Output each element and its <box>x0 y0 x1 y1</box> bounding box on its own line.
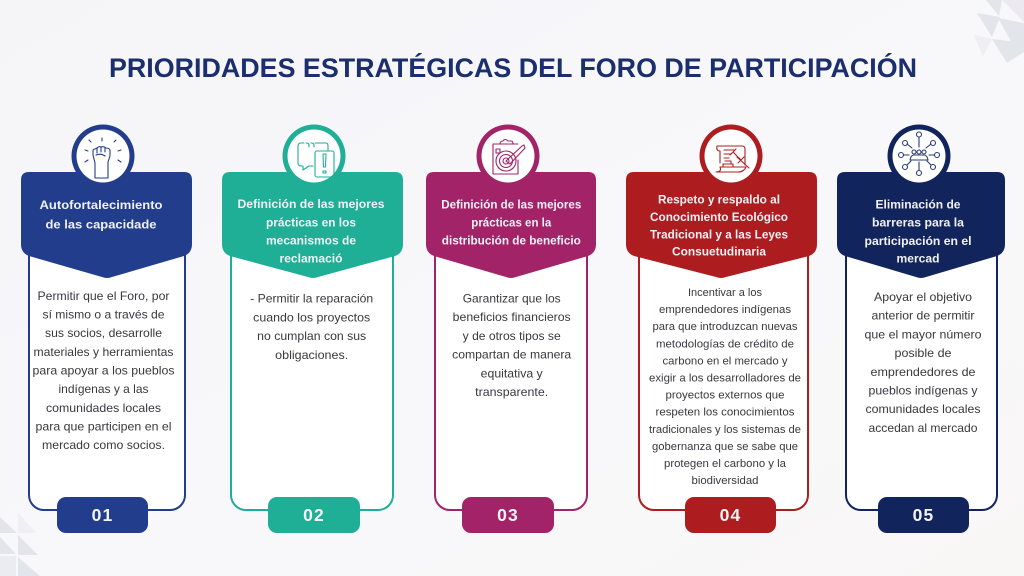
card 1 description <box>32 289 174 452</box>
panel: card 5 market barriers <box>837 124 1005 533</box>
card 4 description: proyectos externos que <box>666 390 784 402</box>
card 4 heading: Consuetudinaria <box>672 245 766 259</box>
card 1 header banner <box>21 172 192 278</box>
card 2 description: cuando los proyectos <box>253 310 370 324</box>
card 4 description: respeten los conocimientos <box>656 407 795 419</box>
panel: card 4 traditional knowledge <box>626 124 817 533</box>
card 2 description: obligaciones. <box>275 348 348 362</box>
card 5 description: pueblos indígenas y <box>868 384 978 398</box>
card 3 description <box>452 292 572 399</box>
card 2 heading <box>238 197 385 265</box>
card 3 number badge <box>462 497 554 533</box>
card 2 number badge: 02 <box>303 505 325 525</box>
card 5 description: comunidades locales <box>866 402 980 416</box>
card 4 description: protegen el carbono y la <box>664 458 787 470</box>
card 4 description: metodologías de crédito de <box>656 338 794 350</box>
panel: card 1 capacity building <box>21 124 192 533</box>
card 1 description: comunidades locales <box>46 401 161 415</box>
card 1 heading: Autofortalecimiento <box>40 198 162 212</box>
card 1 description: sí mismo o a través de <box>42 308 165 322</box>
title: PRIORIDADES ESTRATÉGICAS DEL FORO DE PARTICIPACIÓN <box>109 53 917 83</box>
card 4 description: exigir a los desarrolladores de <box>649 372 801 384</box>
card 2 heading: Definición de las mejores <box>238 197 385 211</box>
card 1 description: mercado como socios. <box>42 438 165 452</box>
card 4 description: gobernanza que se sabe que <box>652 441 798 453</box>
card 4 number badge: 04 <box>720 505 741 525</box>
card 5 body outline <box>846 240 997 510</box>
card 3 heading <box>441 197 582 247</box>
card 1 description: Permitir que el Foro, por <box>38 289 170 303</box>
card 1 number badge <box>57 497 148 533</box>
card 4 description: para que introduzcan nuevas <box>652 321 798 333</box>
card 5 number badge: 05 <box>913 505 934 525</box>
card 5 description: que el mayor número <box>864 327 982 341</box>
card 1 description: materiales y herramientas <box>34 345 174 359</box>
card 5 heading <box>864 197 972 266</box>
card 2 header banner <box>222 172 403 278</box>
card 2 number badge <box>268 497 360 533</box>
panel: card 3 benefit distribution <box>426 124 596 533</box>
card 4 description: biodiversidad <box>692 475 758 487</box>
card 5 heading: barreras para la <box>872 216 964 230</box>
card 3 description: transparente. <box>475 385 548 399</box>
card 5 number badge <box>878 497 969 533</box>
card 5 heading: participación en el <box>864 234 972 248</box>
card 4 heading: Conocimiento Ecológico <box>650 210 788 224</box>
card 3 heading: distribución de beneficio <box>442 233 581 247</box>
card 5 heading: Eliminación de <box>876 197 961 211</box>
card 2 heading: reclamació <box>280 251 342 265</box>
card 1 number badge: 01 <box>92 505 113 525</box>
card 5 heading: mercad <box>896 252 940 266</box>
card 1 icon circle <box>72 124 134 188</box>
card 5 description <box>864 290 982 435</box>
card 4 header banner <box>626 172 817 278</box>
card 3 description: Garantizar que los <box>463 292 561 306</box>
card 2 heading: prácticas en los <box>266 216 356 230</box>
card 1 body outline <box>29 240 185 510</box>
card 3 description: compartan de manera <box>452 348 572 362</box>
card 3 heading: prácticas en la <box>471 216 552 230</box>
card 4 number badge <box>685 497 776 533</box>
card 3 number badge: 03 <box>497 505 519 525</box>
card 3 header banner <box>426 172 596 278</box>
card 1 description: indígenas y a las <box>58 382 148 396</box>
card 2 description <box>250 291 373 362</box>
card 2 icon circle <box>282 124 346 188</box>
card 2 description: no cumplan con sus <box>257 329 366 343</box>
card 2 heading: mecanismos de <box>266 233 356 247</box>
card 4 body outline <box>639 240 808 510</box>
card 3 description: equitativa y <box>481 366 543 380</box>
card 1 description: para que participen en el <box>36 419 172 433</box>
card 4 heading <box>650 192 788 259</box>
card 3 body outline <box>435 240 587 510</box>
card 3 description: beneficios financieros <box>453 310 571 324</box>
card 4 heading: Respeto y respaldo al <box>658 192 780 206</box>
card 1 description: sus socios, desarrolle <box>45 326 162 340</box>
card 5 description: accedan al mercado <box>868 421 978 435</box>
card 5 description: posible de <box>894 346 952 360</box>
card 4 icon circle <box>700 124 762 188</box>
card 3 icon circle <box>476 124 540 188</box>
card 5 icon circle <box>888 124 950 188</box>
card 5 description: Apoyar el objetivo <box>874 290 972 304</box>
card 4 description <box>649 287 801 487</box>
card 4 heading: Tradicional y a las Leyes <box>650 227 788 241</box>
card 4 description: emprendedores indígenas <box>659 304 791 316</box>
card 1 heading: de las capacidade <box>46 218 157 232</box>
card 4 description: tradicionales y los sistemas de <box>649 424 801 436</box>
card 1 description: para apoyar a los pueblos <box>32 364 174 378</box>
card 5 description: anterior de permitir <box>872 309 974 323</box>
card 5 header banner <box>837 172 1005 278</box>
card 4 description: Incentivar a los <box>688 287 762 299</box>
card 3 description: y de otros tipos se <box>463 329 561 343</box>
card 5 description: emprendedores de <box>870 365 976 379</box>
card 2 description: - Permitir la reparación <box>250 291 373 305</box>
card 4 description: carbono en el mercado y <box>662 355 788 367</box>
card 1 heading <box>40 198 162 232</box>
card 2 body outline <box>231 240 393 510</box>
card 3 heading: Definición de las mejores <box>441 197 582 211</box>
panel: card 2 grievance mechanisms <box>222 124 403 533</box>
